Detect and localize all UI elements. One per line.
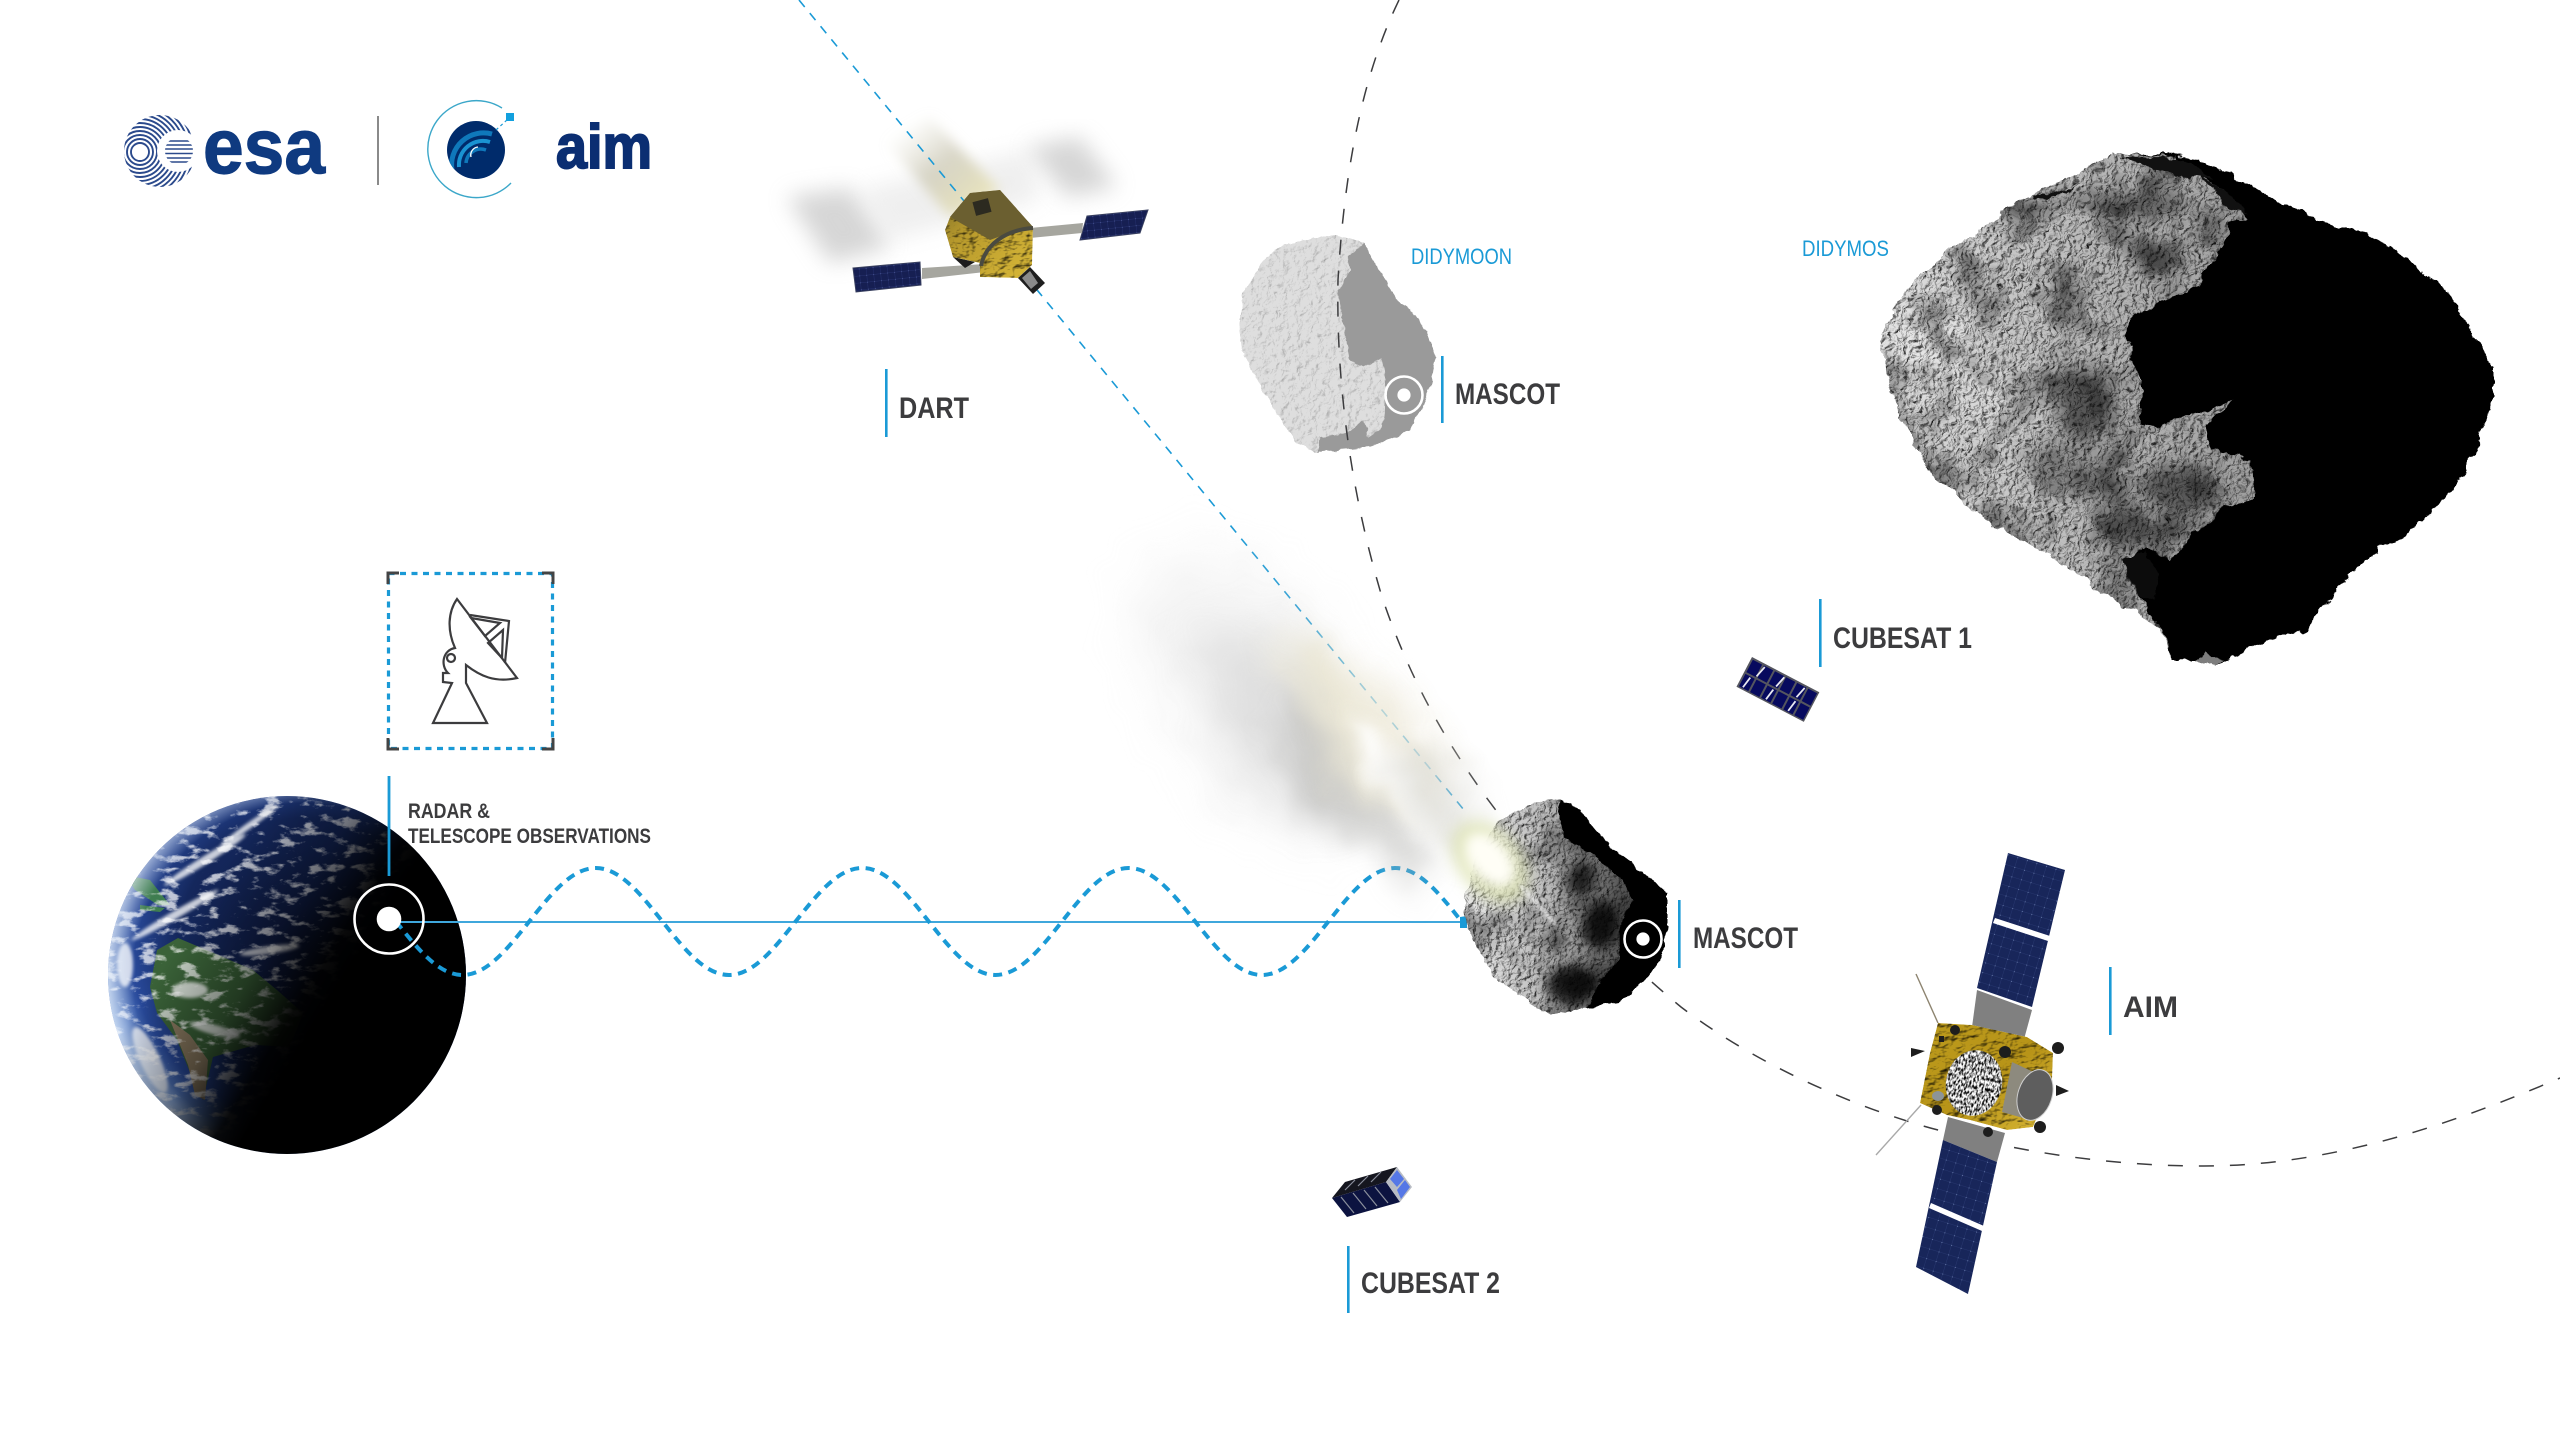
marker: MASCOT on asteroid	[1624, 920, 1662, 958]
impact flash	[1437, 807, 1556, 925]
label: DART: DART	[899, 392, 969, 425]
cloud bands	[117, 802, 300, 1097]
label: MASCOT on impact asteroid	[1678, 900, 1798, 968]
ocean	[108, 796, 466, 1154]
icon: ESA globe	[124, 115, 193, 187]
logo: ESA	[124, 115, 326, 187]
logo: AIM	[428, 101, 652, 198]
asteroid: silhouette	[1463, 799, 1667, 1015]
label: radar and telescope observations: RADAR &	[408, 800, 490, 823]
DART spacecraft	[853, 190, 1148, 294]
instrument disc	[1940, 1045, 2008, 1121]
DART trajectory line	[799, 0, 1464, 810]
label: DIDYMOS: DIDYMOS	[1802, 236, 1889, 261]
label: CUBESAT 1: CUBESAT 1	[1833, 622, 1972, 655]
impact plume	[1093, 514, 1505, 908]
panel: Didymoon impact asteroid	[1464, 799, 1668, 1014]
Earth	[100, 790, 470, 1160]
label: DART	[885, 369, 969, 437]
dotted frame	[388, 574, 552, 748]
wordmark: aim: aim	[556, 113, 652, 182]
atmosphere limb	[108, 796, 335, 1131]
radar wave	[396, 868, 1462, 975]
CubeSat 1 spacecraft	[1736, 657, 1819, 722]
land: Andes	[170, 1020, 208, 1100]
panel: Didymos asteroid	[1870, 140, 2493, 680]
body	[1920, 1023, 2053, 1130]
target marker: Earth station	[354, 884, 424, 954]
label: MASCOT on Didymos system moon: MASCOT	[1455, 378, 1560, 411]
ridge shadows	[2030, 157, 2250, 600]
solar array arms	[1943, 990, 2032, 1162]
CubeSat 2 spacecraft	[1332, 1167, 1412, 1217]
icon: AIM disc	[447, 121, 505, 179]
target marker: Didymoon MASCOT	[1386, 376, 1422, 414]
asteroid: Didymos lit surface	[1880, 152, 2256, 659]
clouds	[100, 790, 470, 1160]
asteroid: Didymoon shadow side	[1239, 235, 1436, 452]
icon: radar dish	[433, 599, 517, 723]
icon: AIM orbit ring	[428, 101, 511, 198]
orbit dashed line	[1338, 0, 2560, 1166]
asteroid: Didymos silhouette	[1881, 153, 2493, 668]
AIM spacecraft	[1876, 853, 2069, 1294]
asteroid: Didymoon lit side	[1239, 235, 1385, 452]
thrusters	[1911, 1025, 2069, 1137]
camera	[1018, 267, 1045, 294]
wordmark: esa: esa	[203, 102, 326, 190]
upper solar array	[1977, 853, 2065, 1007]
land: Central America	[132, 878, 170, 912]
asteroid: lit surface	[1464, 799, 1634, 1014]
land: South America	[150, 938, 303, 1100]
body	[945, 190, 1033, 278]
panel: Didymoon	[1239, 235, 1436, 452]
label: radar and telescope observations	[388, 776, 651, 876]
icon: AIM spacecraft square	[496, 113, 514, 130]
divider	[377, 116, 379, 185]
label: DIDYMOON: DIDYMOON	[1411, 244, 1512, 269]
antennas	[1876, 974, 1938, 1155]
signal line with arrow	[396, 916, 1467, 928]
label: CUBESAT 2: CUBESAT 2	[1361, 1267, 1500, 1300]
booms	[922, 223, 1083, 279]
radar telescope icon box	[388, 573, 553, 749]
label: radar and telescope observations: TELESCOPE OBSERVATIONS	[408, 825, 651, 848]
left solar panel	[853, 262, 921, 292]
frame corners	[388, 573, 553, 749]
lower solar array	[1916, 1140, 1997, 1294]
DART motion blur	[787, 117, 1117, 263]
label: MASCOT on Didymos system moon	[1441, 356, 1560, 423]
high-gain antenna	[2002, 1062, 2059, 1125]
label: MASCOT on impact asteroid: MASCOT	[1693, 922, 1798, 955]
label: AIM	[2109, 967, 2178, 1035]
small lit tip	[2196, 655, 2222, 668]
label: AIM: AIM	[2123, 991, 2178, 1024]
right solar panel	[1080, 210, 1148, 240]
night shadow	[122, 796, 466, 1154]
